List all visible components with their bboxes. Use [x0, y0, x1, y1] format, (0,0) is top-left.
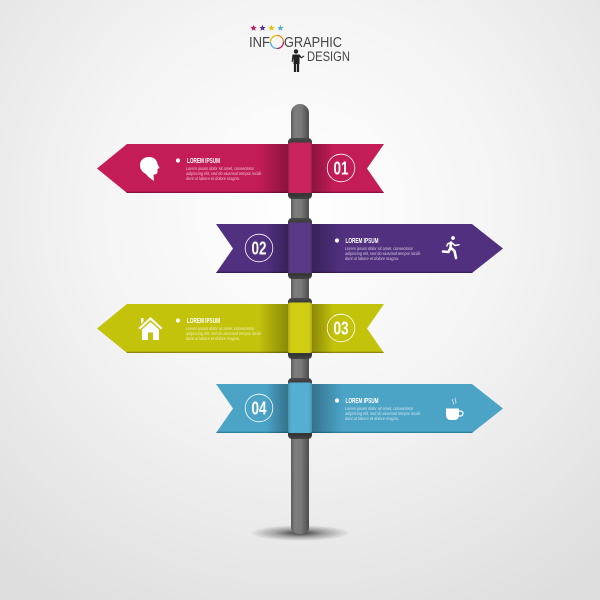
- panel: sign 02: [216, 218, 503, 279]
- ribbon arrow: [97, 144, 384, 193]
- body text: dunt ut labore et dolore magna.: [345, 256, 399, 261]
- icon: runner: [443, 236, 459, 258]
- icon: head: [140, 157, 160, 181]
- body text: [345, 406, 421, 421]
- band caps: [288, 298, 312, 359]
- ribbon edge highlight: [216, 432, 473, 433]
- band: [288, 302, 312, 353]
- band: [288, 382, 312, 433]
- title: LOREM IPSUM: [187, 158, 220, 165]
- band: [288, 222, 312, 273]
- logo heading remainder: GRAPHIC: [284, 34, 342, 51]
- panel: sign 01: [97, 138, 384, 199]
- fold shadow: [258, 144, 288, 193]
- body text: adipiscing elit, sed do eiusmod tempor incidi-: [186, 171, 262, 176]
- ribbon arrow: [216, 384, 503, 433]
- title: LOREM IPSUM: [346, 398, 379, 405]
- band caps: [288, 378, 312, 439]
- band caps: [288, 138, 312, 199]
- icon: presenter: [292, 49, 304, 72]
- band caps: [288, 218, 312, 279]
- body text: dunt ut labore et dolore magna.: [186, 176, 240, 181]
- ribbon arrow: [97, 304, 384, 353]
- number badge: 04: [252, 398, 266, 418]
- ribbon edge highlight: [216, 272, 473, 273]
- bullet: [176, 318, 180, 323]
- panel: sign 03: [97, 298, 384, 359]
- logo: [249, 25, 350, 72]
- number badge: 01: [334, 158, 348, 178]
- title: LOREM IPSUM: [346, 238, 379, 245]
- logo subheading: DESIGN: [307, 49, 350, 64]
- bullet: [335, 238, 339, 243]
- icon: house: [138, 317, 162, 340]
- body text: Lorem ipsum dolor sit amet, consectetur: [345, 406, 413, 411]
- logo stars: [250, 25, 284, 31]
- body text: Lorem ipsum dolor sit amet, consectetur: [345, 246, 413, 251]
- band: [288, 142, 312, 193]
- body text: Lorem ipsum dolor sit amet, consectetur: [186, 326, 254, 331]
- body text: Lorem ipsum dolor sit amet, consectetur: [186, 166, 254, 171]
- bullet: [176, 158, 180, 163]
- number badge: [245, 394, 273, 422]
- pole shadow: [250, 525, 350, 541]
- ribbon arrow: [216, 224, 503, 273]
- body text: [186, 326, 262, 341]
- body text: [186, 166, 262, 181]
- pole: [250, 104, 350, 541]
- logo heading: INF: [249, 34, 270, 51]
- body text: dunt ut labore et dolore magna.: [186, 336, 240, 341]
- body text: [345, 246, 421, 261]
- panel: sign 04: [216, 378, 503, 439]
- number badge: 03: [334, 318, 348, 338]
- number badge: [245, 234, 273, 262]
- body text: dunt ut labore et dolore magna.: [345, 416, 399, 421]
- body text: adipiscing elit, sed do eiusmod tempor incidi-: [345, 411, 421, 416]
- fold shadow: [266, 224, 288, 273]
- pole shaft: [291, 104, 309, 534]
- body text: adipiscing elit, sed do eiusmod tempor incidi-: [345, 251, 421, 256]
- ribbon edge highlight: [126, 192, 384, 193]
- number badge: [327, 314, 355, 342]
- logo ring: [270, 36, 284, 48]
- number badge: [327, 154, 355, 182]
- icon: coffee cup: [446, 398, 463, 420]
- body text: adipiscing elit, sed do eiusmod tempor incidi-: [186, 331, 262, 336]
- fold shadow: [266, 384, 288, 433]
- fold shadow: [258, 304, 288, 353]
- ribbon edge highlight: [126, 352, 384, 353]
- number badge: 02: [252, 238, 266, 258]
- bullet: [335, 398, 339, 403]
- title: LOREM IPSUM: [187, 318, 220, 325]
